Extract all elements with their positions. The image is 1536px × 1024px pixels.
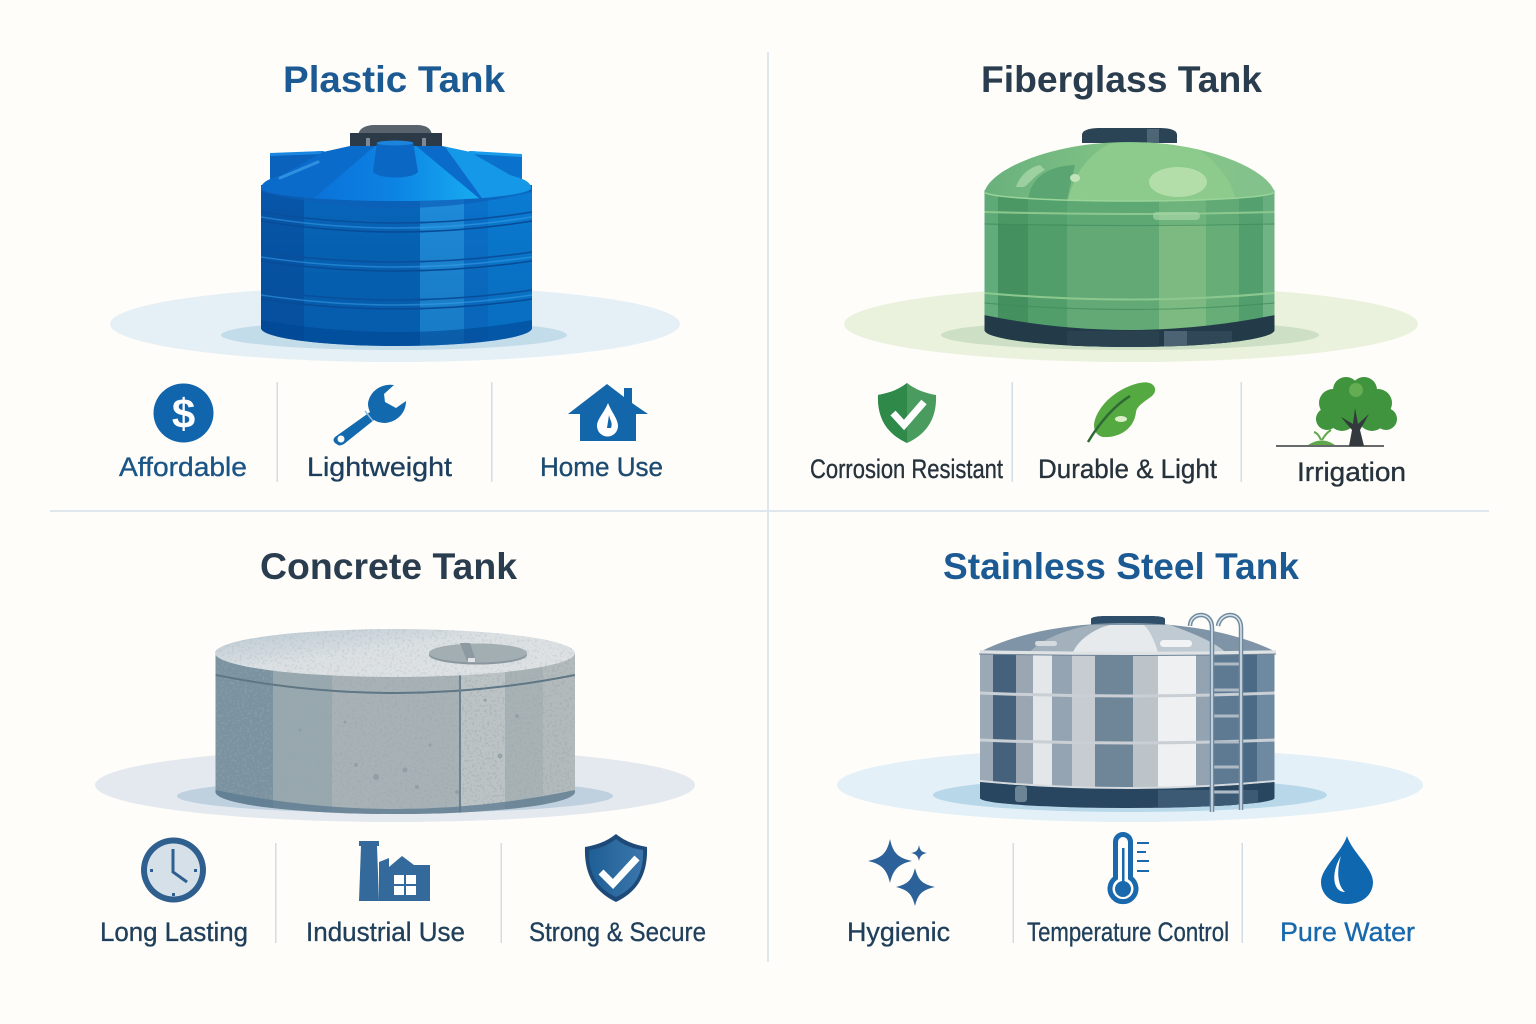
divider lines	[276, 382, 492, 482]
panel: plastic tank	[110, 59, 680, 482]
icon: dollar	[154, 384, 214, 442]
panel: fiberglass tank	[810, 59, 1418, 487]
horizontal divider	[50, 510, 1489, 512]
fiberglass tank illustration	[980, 128, 1280, 360]
label: Strong & Secure: Strong & Secure	[529, 917, 706, 947]
label: Corrosion Resistant: Corrosion Resistant	[810, 454, 1003, 484]
icon: tree	[1276, 377, 1397, 446]
plastic tank illustration	[261, 125, 540, 350]
ground shadow	[844, 286, 1418, 362]
icon: green shield check	[878, 383, 936, 443]
label: Durable & Light: Durable & Light	[1038, 454, 1217, 484]
label: Irrigation: Irrigation	[1297, 457, 1406, 487]
heading: Concrete Tank: Concrete Tank	[260, 546, 517, 587]
icon: factory	[359, 841, 430, 901]
label: Lightweight: Lightweight	[307, 452, 453, 482]
heading: Fiberglass Tank: Fiberglass Tank	[981, 59, 1262, 100]
hatch lid	[429, 643, 527, 664]
label: Industrial Use: Industrial Use	[306, 917, 465, 947]
label: Home Use: Home Use	[540, 452, 663, 482]
vertical divider	[767, 52, 769, 962]
icon: sparkles	[868, 839, 935, 906]
label: Temperature Control: Temperature Control	[1027, 917, 1229, 947]
heading: Stainless Steel Tank: Stainless Steel Tank	[943, 546, 1299, 587]
panel: concrete tank	[95, 546, 706, 947]
concrete tank illustration	[215, 629, 576, 820]
heading: Plastic Tank: Plastic Tank	[283, 59, 505, 100]
divider lines	[275, 843, 502, 943]
icon: water drop	[1321, 836, 1373, 904]
panel: stainless steel tank	[837, 546, 1423, 947]
label: Long Lasting: Long Lasting	[100, 917, 248, 947]
stainless steel tank illustration	[975, 615, 1280, 820]
label: Pure Water: Pure Water	[1280, 917, 1415, 947]
label: Affordable: Affordable	[119, 452, 247, 482]
ground shadow	[95, 748, 695, 822]
icon: blue shield check	[585, 834, 647, 902]
icon: clock	[141, 838, 206, 902]
icon: leaf	[1088, 382, 1155, 442]
icon: wrench	[334, 385, 406, 445]
divider lines	[1012, 382, 1242, 482]
ground shadow	[110, 286, 680, 362]
icon: thermometer	[1110, 834, 1149, 902]
icon: house with water drop	[568, 384, 648, 441]
ladder	[1190, 615, 1241, 812]
ground shadow	[837, 748, 1423, 822]
divider lines	[1012, 843, 1243, 943]
icon: dollar: $	[172, 390, 195, 437]
label: Hygienic: Hygienic	[847, 917, 950, 947]
